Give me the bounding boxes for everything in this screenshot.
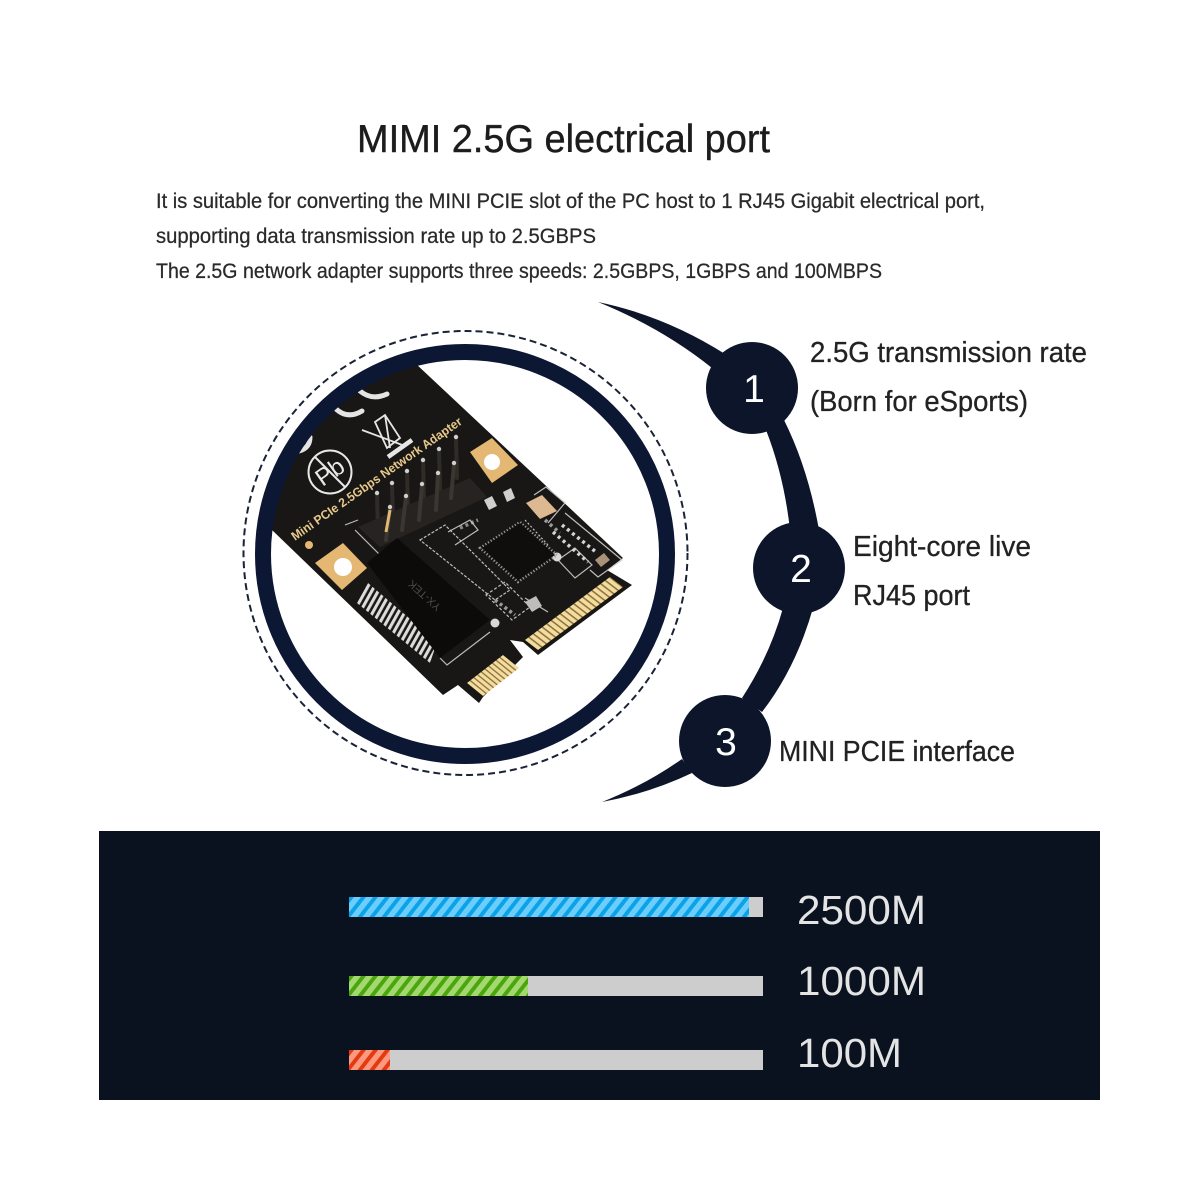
title: MIMI 2.5G electrical port bbox=[357, 118, 770, 161]
silkscreen outlines bbox=[345, 487, 622, 665]
description text block: The 2.5G network adapter supports three speeds: 2.5GBPS, 1GBPS and 100MBPS bbox=[156, 259, 882, 283]
step 1 label bbox=[810, 337, 1087, 418]
step 2 marker: 2 bbox=[790, 548, 812, 591]
board label text: Mini PCIe 2.5Gbps Network Adapter bbox=[289, 414, 465, 543]
step 2 label: RJ45 port bbox=[853, 580, 970, 612]
pin header bbox=[358, 435, 487, 547]
bar: 100M: 100M bbox=[797, 1030, 902, 1076]
bar: 1000M bbox=[349, 958, 926, 1004]
inner navy ring bbox=[263, 352, 667, 756]
infographic canvas bbox=[99, 123, 1100, 1100]
description text block: It is suitable for converting the MINI PCIE slot of the PC host to 1 RJ45 Gigabit electrical port, bbox=[156, 189, 985, 213]
small surface components bbox=[484, 488, 610, 628]
step 1 label: (Born for eSports) bbox=[810, 386, 1028, 418]
dense solder pads bbox=[460, 520, 596, 615]
product photo: Mini PCIe network adapter board bbox=[272, 366, 632, 703]
bar: 2500M: 2500M bbox=[797, 887, 926, 933]
description text block bbox=[156, 189, 985, 283]
icon: crossed-out bin bbox=[362, 415, 412, 457]
transformer module and leads bbox=[357, 538, 490, 663]
step 1 marker bbox=[706, 342, 798, 434]
main controller chip bbox=[480, 522, 557, 582]
description text block: supporting data transmission rate up to 2.5GBPS bbox=[156, 224, 596, 248]
bar: 2500M bbox=[349, 887, 926, 933]
step 2 label bbox=[853, 531, 1031, 612]
step 1 marker: 1 bbox=[743, 368, 765, 411]
step 1 label: 2.5G transmission rate bbox=[810, 337, 1087, 369]
gold connector fingers bbox=[467, 577, 623, 696]
dashed outer circle bbox=[244, 331, 688, 775]
step 3 marker: 3 bbox=[715, 721, 737, 764]
curved timeline arc bbox=[598, 302, 819, 802]
step 2 marker bbox=[753, 522, 845, 614]
panel: speed comparison bbox=[99, 831, 1100, 1100]
bar: 100M bbox=[349, 1030, 902, 1076]
step 3 marker bbox=[679, 695, 771, 787]
step 2 label: Eight-core live bbox=[853, 531, 1031, 563]
icon: lead-free Pb mark: Pb bbox=[311, 453, 350, 492]
step 3 label: MINI PCIE interface bbox=[779, 736, 1015, 768]
bar: 1000M: 1000M bbox=[797, 958, 926, 1004]
icon: CE marks bbox=[299, 391, 387, 451]
gold mounting pads bbox=[305, 438, 518, 590]
transformer module and leads: YX-TEK bbox=[406, 577, 444, 613]
